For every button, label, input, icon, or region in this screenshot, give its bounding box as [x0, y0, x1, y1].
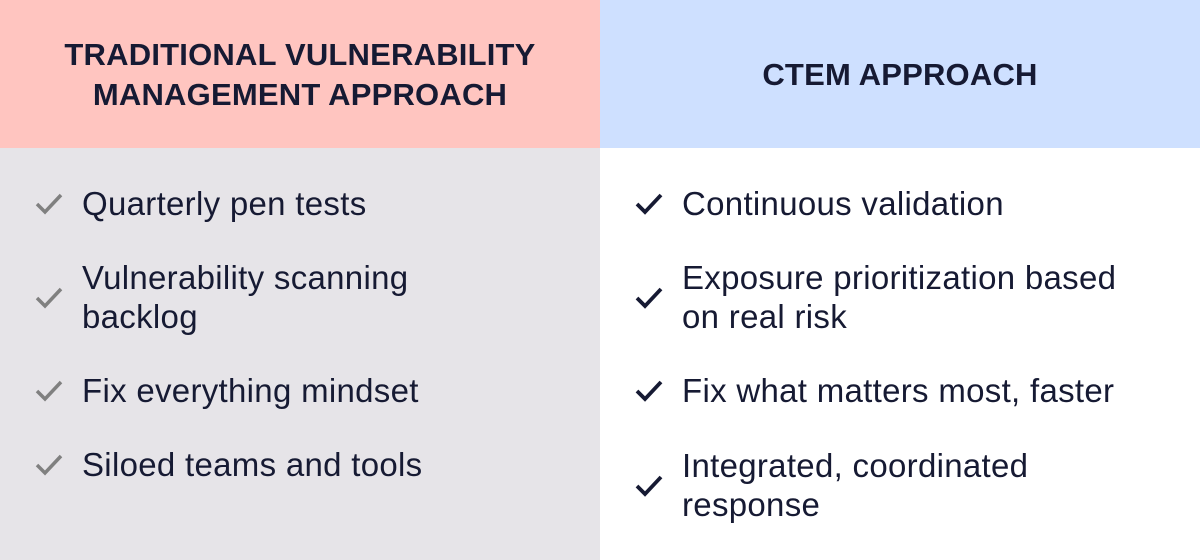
item: Exposure prioritization based — [682, 259, 1116, 296]
item — [82, 259, 408, 335]
item: backlog — [82, 298, 198, 335]
item: Integrated, coordinated — [682, 447, 1028, 484]
panel: traditional — [0, 0, 600, 560]
icon: check — [636, 288, 662, 309]
item: Vulnerability scanning — [82, 259, 408, 296]
item: on real risk — [682, 298, 847, 335]
item — [682, 447, 1028, 523]
item: Siloed teams and tools — [82, 446, 422, 483]
icon: check — [36, 194, 62, 214]
item: Continuous validation — [682, 185, 1004, 222]
icon: check — [636, 380, 662, 402]
heading: ctem: CTEM APPROACH — [762, 57, 1038, 92]
icon: check — [36, 454, 62, 476]
item: Quarterly pen tests — [82, 185, 366, 222]
panel: ctem — [600, 0, 1200, 523]
icon: check — [36, 380, 62, 402]
heading: ctem — [600, 0, 1200, 150]
heading: traditional: MANAGEMENT APPROACH — [93, 77, 507, 112]
item: Fix everything mindset — [82, 372, 419, 409]
item: Fix what matters most, faster — [682, 372, 1114, 409]
item — [682, 259, 1116, 335]
heading: traditional — [0, 0, 600, 150]
heading: traditional: TRADITIONAL VULNERABILITY — [64, 37, 536, 72]
icon: check — [36, 288, 62, 308]
icon: check — [636, 194, 662, 215]
body: traditional list — [0, 148, 600, 560]
body: ctem list — [600, 148, 1200, 560]
item: response — [682, 486, 820, 523]
icon: check — [636, 476, 662, 497]
